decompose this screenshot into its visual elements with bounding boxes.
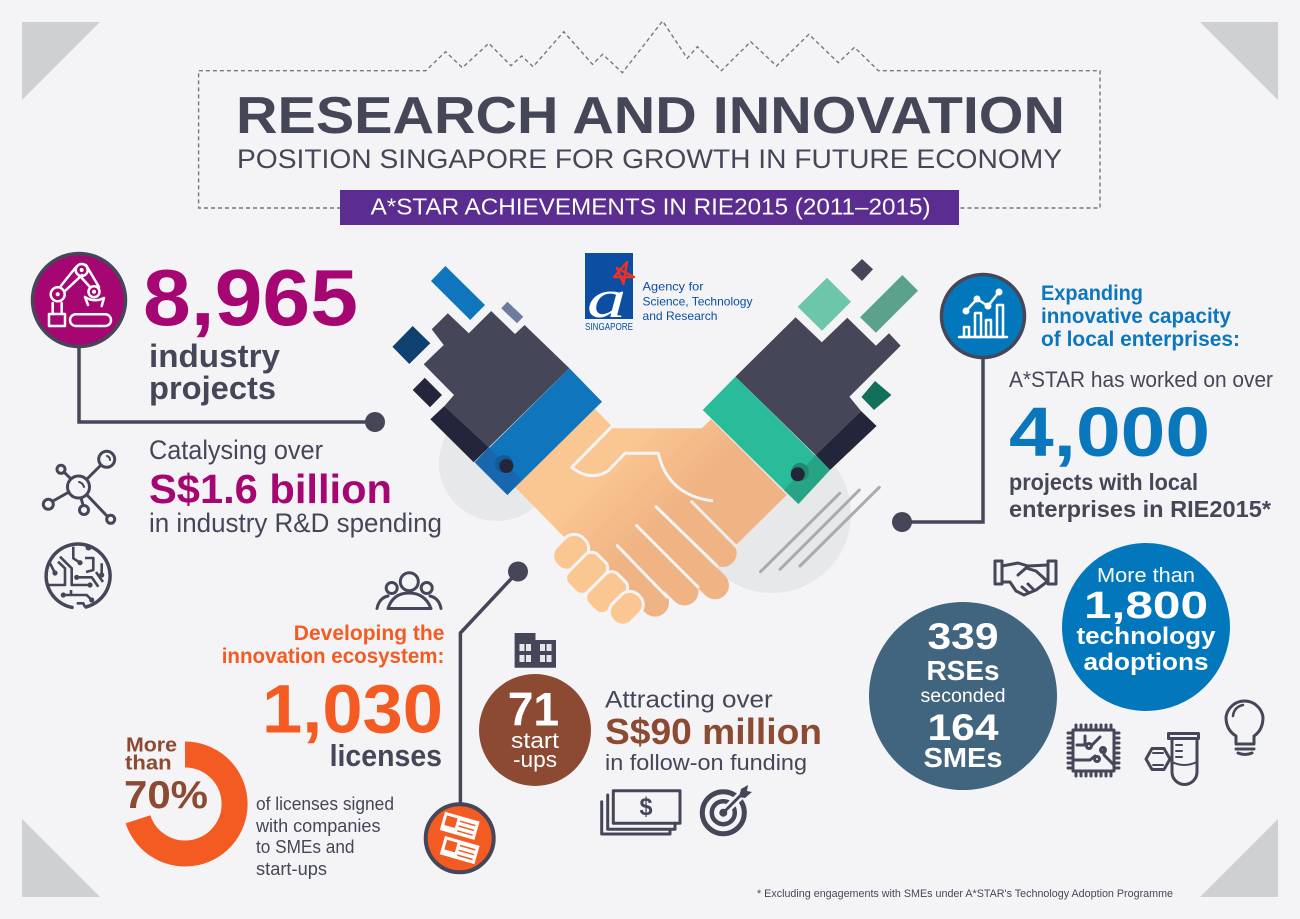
badge: researchers seconded: RSEs — [926, 655, 1000, 686]
icon: microchip — [1068, 725, 1119, 776]
heading: expanding innovative capacity: Expanding — [1041, 282, 1143, 305]
handshake illustration — [392, 259, 918, 630]
footnote: * Excluding engagements with SMEs under A*STAR's Technology Adoption Programme — [757, 888, 1173, 900]
text: industry spending: S$1.6 billion — [149, 466, 392, 512]
icon: robot arm badge — [32, 254, 126, 346]
text: follow-on funding: Attracting over — [605, 687, 773, 714]
badge: technology adoptions: adoptions — [1084, 649, 1208, 676]
stat: local enterprise projects: projects with local — [1009, 469, 1198, 495]
text: developing the innovation ecosystem — [222, 622, 444, 773]
donut chart: 70%: More — [126, 735, 177, 757]
badge: technology adoptions: More than — [1097, 565, 1195, 587]
logo: A*STAR: SINGAPORE — [585, 322, 633, 333]
icon: circuit brain — [46, 544, 110, 607]
stat: industry projects: 8,965 — [143, 253, 358, 342]
badge: researchers seconded: 164 — [928, 707, 999, 748]
icon: target — [702, 785, 752, 834]
icon: small handshake — [995, 561, 1056, 595]
logo letter: a — [587, 269, 626, 329]
badge: technology adoptions: technology — [1076, 623, 1216, 650]
badge: researchers seconded: 339 — [928, 616, 998, 657]
stat: local enterprise projects: 4,000 — [1009, 393, 1210, 471]
icon: money stack — [602, 791, 680, 834]
text: licenses description — [255, 794, 394, 879]
right sleeve — [703, 259, 918, 504]
stat: industry projects: projects — [149, 370, 276, 406]
icon: building — [515, 633, 556, 668]
badge: technology adoptions: 1,800 — [1084, 585, 1208, 627]
text: developing the innovation ecosystem: innovation ecosystem: — [222, 645, 444, 668]
badge: 71 start-ups: 71 — [508, 683, 559, 736]
text: follow-on funding: in follow-on funding — [605, 750, 807, 775]
heading: expanding innovative capacity — [1041, 282, 1240, 351]
icon: money stack: $ — [640, 793, 653, 821]
heading: expanding innovative capacity: of local enterprises: — [1041, 328, 1240, 351]
donut chart: 70%: than — [125, 752, 172, 774]
dashed title frame with skyline — [199, 21, 1100, 208]
stat: local enterprise projects — [1009, 367, 1273, 522]
icon: network — [43, 451, 115, 523]
donut chart: 70% — [124, 735, 235, 853]
text: licenses description: of licenses signed — [256, 794, 394, 814]
text: follow-on funding: S$90 million — [605, 711, 822, 752]
badge: researchers seconded: seconded — [920, 686, 1006, 707]
badge: researchers seconded — [869, 602, 1057, 790]
text: follow-on funding — [605, 687, 822, 775]
icon: chart badge — [942, 274, 1024, 358]
stat: local enterprise projects: enterprises in RIE2015* — [1009, 496, 1271, 522]
badge: technology adoptions — [1062, 543, 1230, 711]
icon: light bulb — [1226, 701, 1263, 754]
logo: A*STAR — [585, 253, 752, 333]
text: licenses description: with companies — [255, 816, 380, 836]
connector: ecosystem — [460, 562, 528, 805]
stat: local enterprise projects: A*STAR has worked on over — [1009, 367, 1273, 392]
badge: 71 start-ups: start — [511, 728, 559, 753]
text: industry spending: in industry R&D spending — [149, 508, 442, 538]
text: industry spending — [149, 435, 442, 538]
left sleeve — [392, 266, 602, 495]
stat: industry projects: industry — [149, 338, 280, 374]
logo: A*STAR: and Research — [642, 309, 718, 323]
purple banner: A*STAR ACHIEVEMENTS IN RIE2015 (2011–2015) — [371, 194, 931, 220]
badge: 71 start-ups: -ups — [513, 747, 557, 772]
logo star — [614, 262, 634, 284]
icon: licence documents badge — [426, 804, 494, 872]
connector: local enterprises — [892, 355, 983, 532]
clasped hands — [515, 409, 787, 630]
badge: researchers seconded: SMEs — [924, 742, 1002, 773]
stat: industry projects — [143, 253, 358, 406]
text: licenses description: start-ups — [256, 859, 327, 879]
heading: expanding innovative capacity: innovative capacity — [1041, 305, 1231, 328]
logo: A*STAR: Science, Technology — [642, 294, 752, 308]
text: developing the innovation ecosystem: 1,030 — [262, 671, 443, 748]
connector: industry projects — [79, 340, 385, 432]
text: licenses description: to SMEs and — [256, 837, 354, 857]
title: RESEARCH AND INNOVATION — [236, 87, 1065, 145]
logo: A*STAR: Agency for — [642, 280, 704, 294]
icon: people group — [377, 573, 441, 608]
icon: test tube and molecule — [1146, 734, 1198, 784]
subtitle: POSITION SINGAPORE FOR GROWTH IN FUTURE ECONOMY — [237, 144, 1062, 174]
text: developing the innovation ecosystem: licenses — [330, 738, 442, 773]
donut chart: 70%: 70% — [124, 774, 208, 817]
badge: 71 start-ups — [479, 674, 591, 786]
text: developing the innovation ecosystem: Developing the — [294, 622, 444, 645]
text: industry spending: Catalysing over — [149, 435, 323, 465]
purple banner — [340, 190, 959, 225]
